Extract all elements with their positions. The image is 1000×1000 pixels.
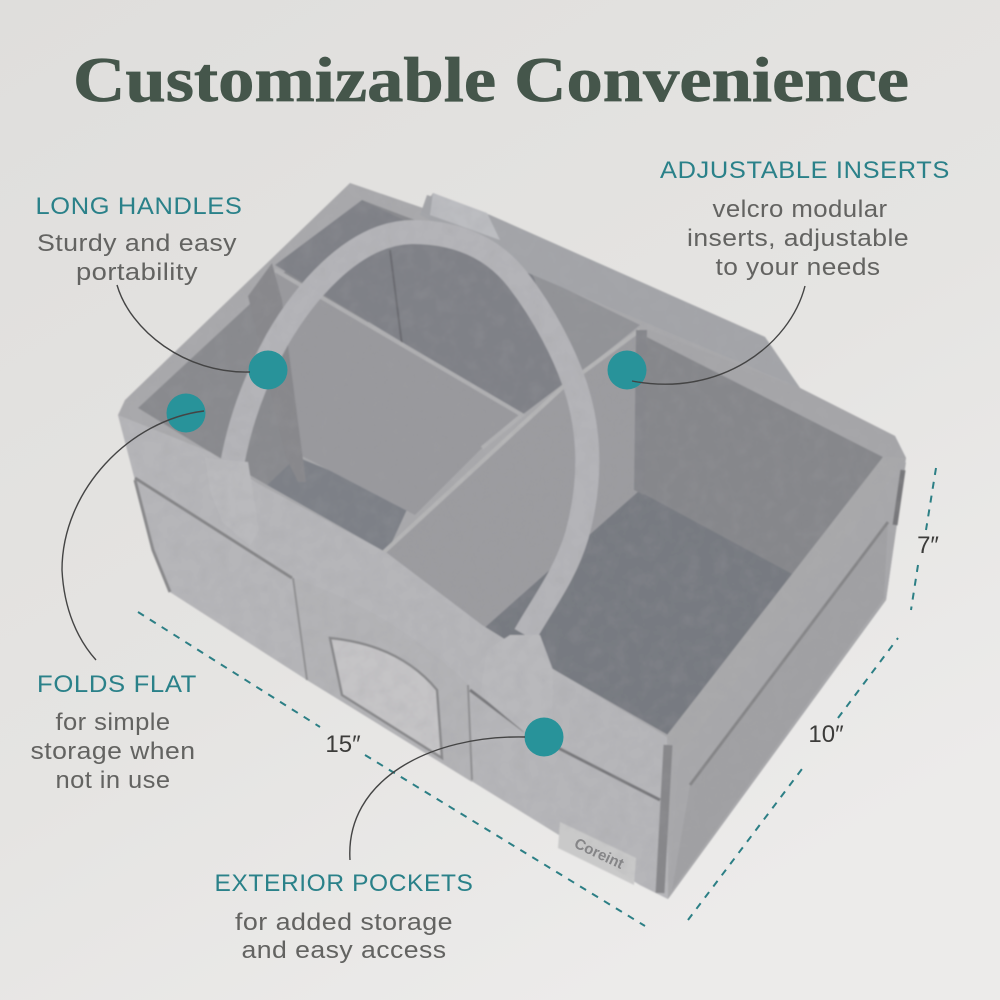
callout: exterior pockets: and easy access [242,937,446,964]
leader lines [62,285,805,860]
right pocket [672,522,888,890]
left divider [275,270,522,515]
marker: exterior pockets [524,718,564,756]
handle right base [480,635,553,737]
centre pocket fold left [293,578,307,680]
centre pocket fold right [468,685,472,780]
brand label text: Coreint [572,835,626,873]
callout: adjustable inserts [660,157,950,281]
marker: adjustable inserts [608,350,646,390]
dimension: 7 inch: 7″ [917,532,939,559]
left divider rim [275,270,522,448]
callout: adjustable inserts: inserts, adjustable [687,225,909,252]
right front pocket edge [470,690,660,800]
marker: long handles [248,350,288,390]
rear compartment wall [275,200,575,415]
callout: folds flat: not in use [56,767,170,794]
dimension: 15 inch: 15″ [325,731,361,758]
right floor [482,490,800,735]
dimension: 10 inch: 10″ [808,721,844,748]
label tag [558,822,636,885]
rear wall fold [390,250,402,345]
callout: adjustable inserts: ADJUSTABLE INSERTS [660,157,950,184]
callout: exterior pockets: EXTERIOR POCKETS [214,870,474,897]
callout: adjustable inserts: velcro modular [712,196,888,223]
callout: exterior pockets: for added storage [235,909,453,936]
left front pocket edge [135,478,292,578]
right face [668,462,906,899]
back-right wall [637,337,883,578]
title: Customizable Convenience [73,45,909,115]
handle left base [205,458,259,546]
window pocket [330,638,442,758]
left floor [267,457,410,553]
dashed dimension lines [138,468,936,926]
handle [232,232,587,635]
callout: exterior pockets [214,870,474,964]
callout: adjustable inserts: to your needs [716,254,880,281]
callout: long handles: Sturdy and easy [37,230,237,257]
callout: folds flat: storage when [30,738,196,765]
narrow insert strip [248,263,306,482]
rear upper wall [533,273,640,387]
front face [118,415,668,899]
rear flap [420,195,800,388]
callout: folds flat: for simple [56,709,170,736]
front corner seam [660,745,668,893]
left outline [135,480,170,592]
callout: long handles: LONG HANDLES [36,193,243,220]
felt mottling [100,170,920,910]
flap top tab [430,193,500,240]
silhouette [118,183,906,899]
callout: long handles [36,193,243,286]
felt caddy organizer [100,170,920,910]
callout: folds flat: FOLDS FLAT [37,671,197,698]
back-left wall [138,200,420,485]
divider seam [634,330,647,495]
callout: long handles: portability [76,259,198,286]
callout: folds flat [30,671,197,794]
back-right rim [647,329,906,458]
right pocket edge [690,522,888,785]
right corner dark [895,470,903,525]
centre divider [384,330,640,630]
centre divider rim [384,330,640,552]
marker: folds flat [166,394,206,432]
right rim [667,457,906,755]
centre pocket [293,578,472,782]
